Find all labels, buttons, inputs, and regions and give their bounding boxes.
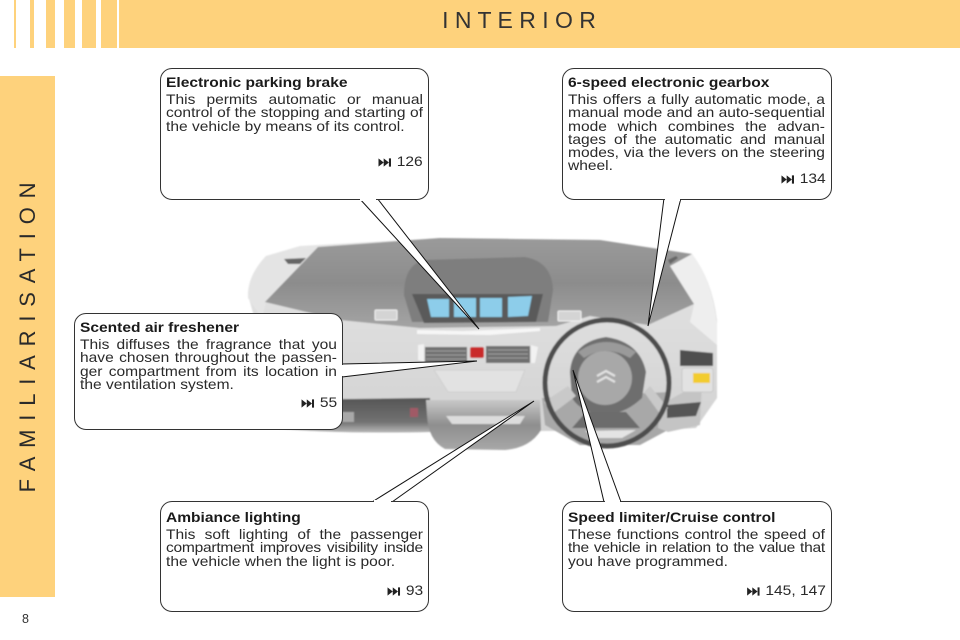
central vents bbox=[425, 347, 467, 362]
panel: scented air freshener bbox=[74, 313, 343, 430]
page reference: 93 bbox=[406, 583, 423, 598]
page reference: 145, 147 bbox=[765, 583, 826, 598]
dashboard illustration bbox=[248, 238, 717, 450]
sidebar bbox=[0, 76, 55, 597]
centre hood bbox=[404, 257, 553, 322]
wheel rim bbox=[545, 320, 669, 446]
white side wings bbox=[248, 248, 320, 318]
heading: Electronic parking brake bbox=[166, 75, 348, 90]
page reference bbox=[378, 154, 423, 169]
glove box panel bbox=[434, 370, 525, 392]
right switches bbox=[667, 402, 701, 418]
wheel hub bbox=[570, 337, 646, 414]
description: control of the stopping and starting of bbox=[166, 105, 423, 120]
panel: ambiance lighting bbox=[160, 501, 429, 612]
heading: Speed limiter/Cruise control bbox=[568, 510, 775, 525]
description bbox=[80, 337, 337, 392]
heading: Scented air freshener bbox=[80, 320, 239, 335]
dashboard top bbox=[265, 238, 694, 328]
callout pointer lines bbox=[342, 198, 681, 502]
centre console bbox=[426, 400, 541, 450]
display light strip bbox=[417, 328, 540, 335]
description: mode which combines the advan- bbox=[568, 119, 825, 134]
dashboard lower body bbox=[248, 238, 717, 432]
description: have chosen throughout the passen- bbox=[80, 350, 337, 365]
description: you have programmed. bbox=[568, 554, 728, 569]
description: modes, via the levers on the steering bbox=[568, 145, 825, 160]
small vents on top bbox=[375, 310, 397, 320]
page reference bbox=[302, 395, 337, 410]
description: the vehicle by means of its control. bbox=[166, 119, 405, 134]
description: the vehicle in relation to the value that bbox=[568, 540, 825, 555]
display screens bbox=[427, 299, 449, 317]
centre display frame bbox=[412, 294, 543, 323]
red hazard button bbox=[470, 347, 484, 358]
description: wheel. bbox=[568, 158, 613, 173]
right lower panels bbox=[658, 382, 702, 432]
panel: electronic parking brake bbox=[160, 68, 429, 200]
right vent bbox=[680, 350, 713, 366]
page reference bbox=[388, 583, 423, 598]
page reference bbox=[782, 171, 826, 186]
right console and yellow display bbox=[682, 368, 713, 392]
description: compartment improves visibility inside bbox=[166, 540, 423, 555]
description bbox=[568, 527, 826, 569]
panel: speed limiter / cruise control bbox=[562, 501, 832, 612]
wheel spokes bbox=[544, 386, 576, 414]
heading: 6-speed electronic gearbox bbox=[568, 75, 769, 90]
description: This diffuses the fragrance that you bbox=[80, 337, 337, 352]
description: manual mode and an auto-sequential bbox=[568, 105, 825, 120]
description: ger compartment from its location in bbox=[80, 364, 337, 379]
lower dark shadow band bbox=[270, 398, 430, 432]
description: the ventilation system. bbox=[80, 377, 234, 392]
page reference: 134 bbox=[800, 171, 826, 186]
vent surrounds bbox=[418, 344, 538, 363]
description bbox=[166, 92, 423, 134]
description: This permits automatic or manual bbox=[166, 92, 423, 107]
panel: 6-speed electronic gearbox bbox=[562, 68, 832, 200]
sidebar heading: FAMILIARISATION bbox=[15, 174, 40, 492]
page reference: 126 bbox=[397, 154, 423, 169]
description: tages of the automatic and manual bbox=[568, 132, 825, 147]
page number: 8 bbox=[22, 612, 29, 626]
title: I N T E R I O R bbox=[442, 7, 596, 33]
Citroen chevrons bbox=[597, 371, 615, 382]
description: This soft lighting of the passenger bbox=[166, 527, 423, 542]
lower right cover behind wheel bbox=[542, 392, 670, 445]
description: the vehicle when the light is poor. bbox=[166, 554, 395, 569]
page reference: 55 bbox=[320, 395, 337, 410]
description: These functions control the speed of bbox=[568, 527, 825, 542]
description bbox=[166, 527, 423, 569]
steering wheel bbox=[544, 320, 669, 446]
heading: Ambiance lighting bbox=[166, 510, 301, 525]
header band bbox=[14, 0, 960, 48]
description: This offers a fully automatic mode, a bbox=[568, 92, 825, 107]
description bbox=[568, 92, 825, 173]
